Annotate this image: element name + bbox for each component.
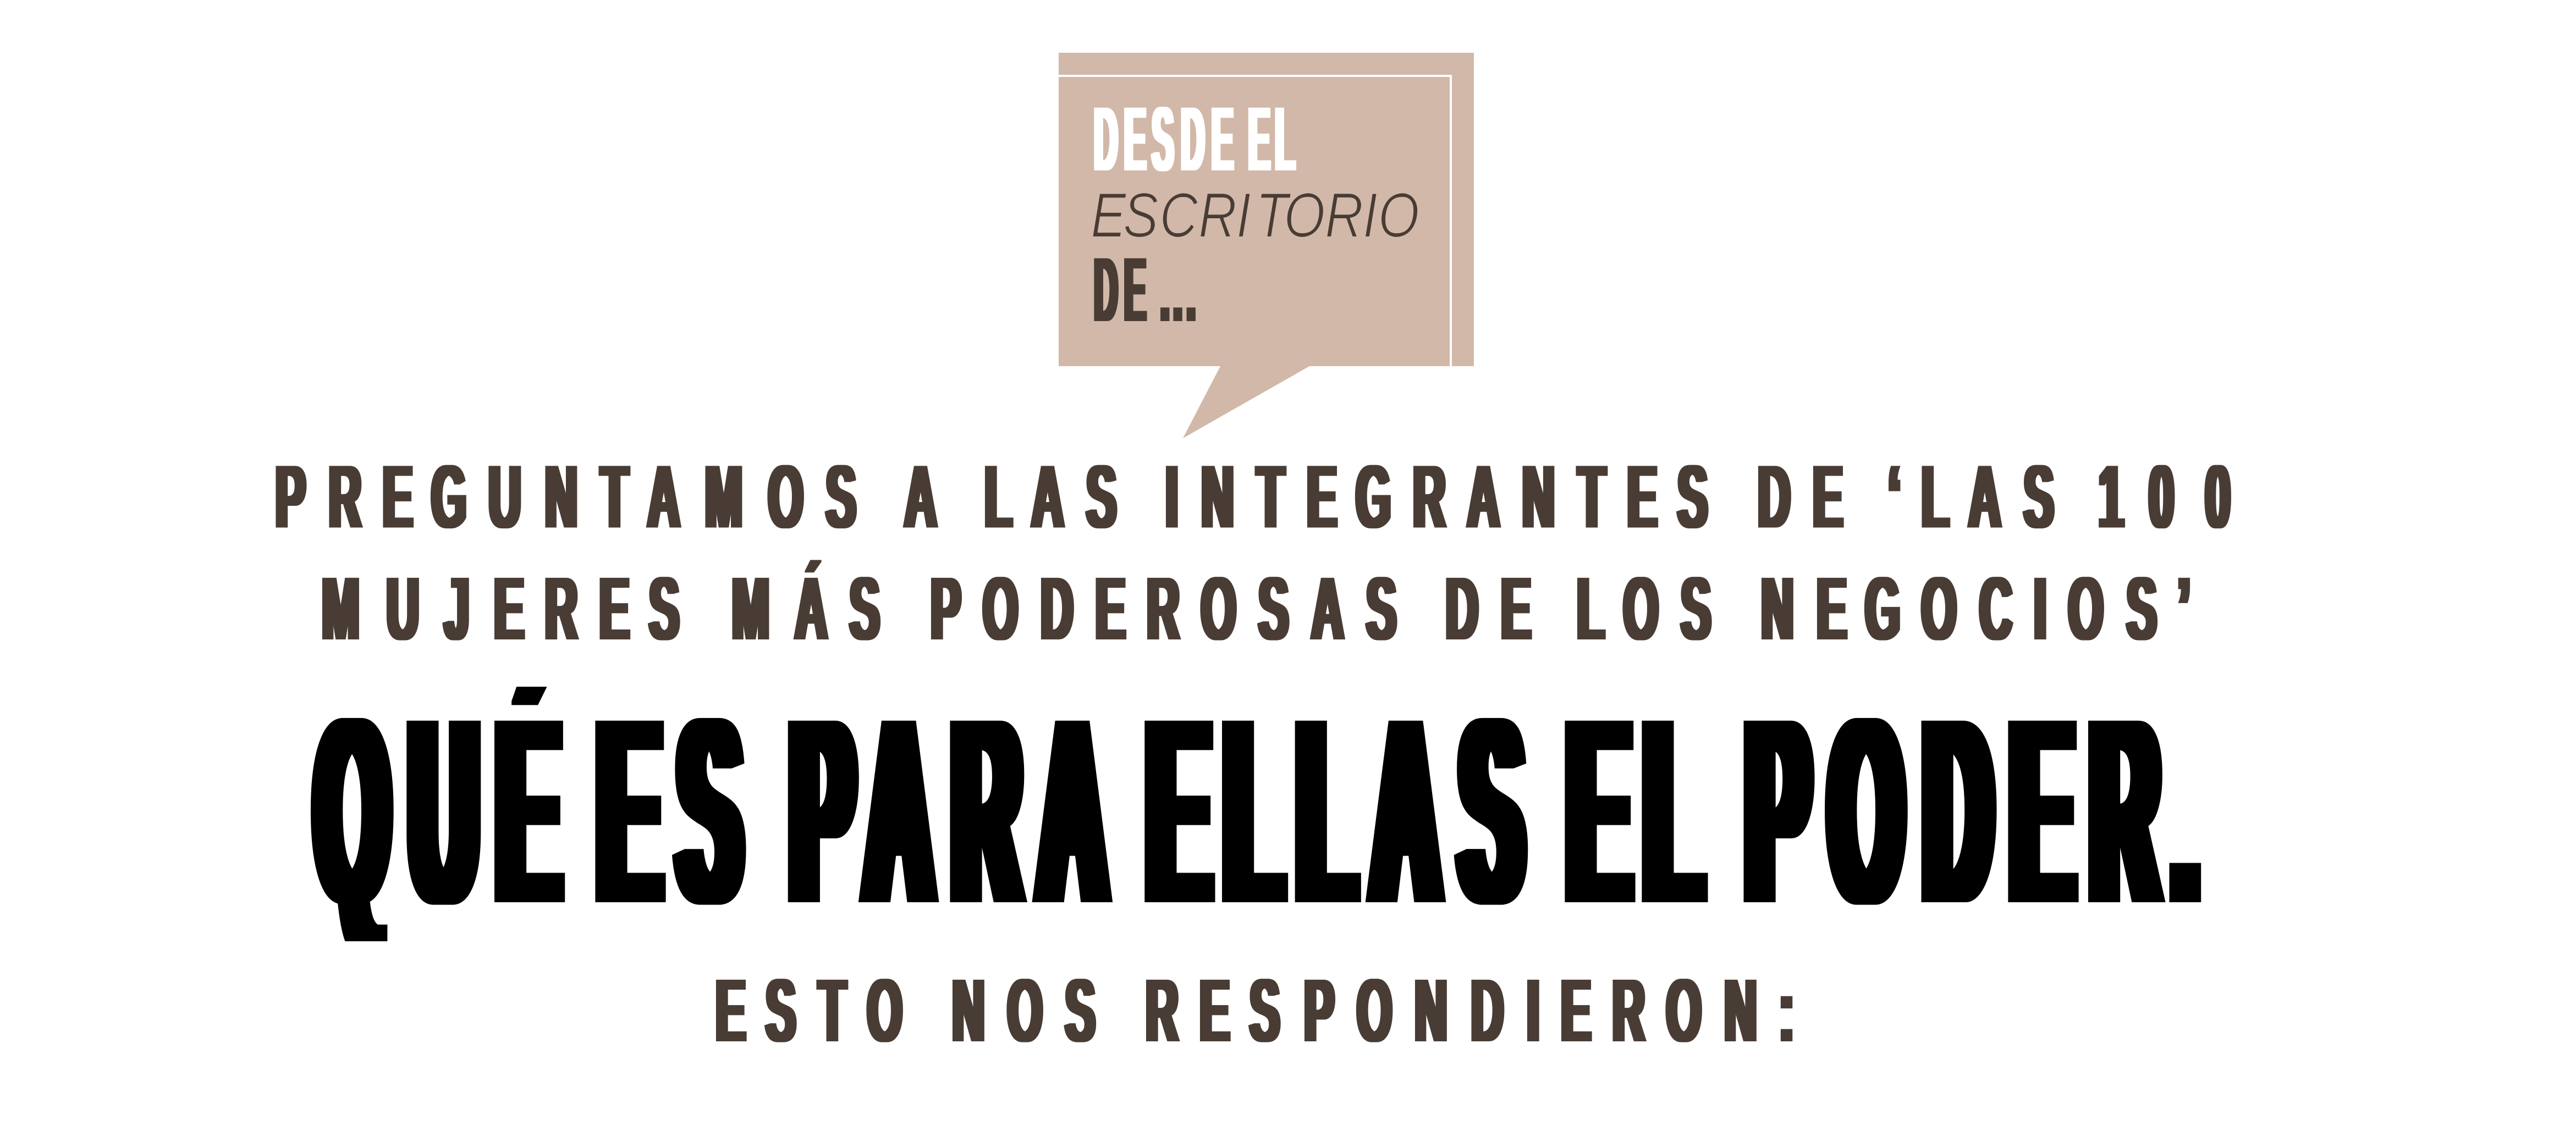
intro text line 2: MUJERES MÁS PODEROSAS DE LOS NEGOCIOS’ (322, 559, 2190, 659)
speech bubble callout (1059, 53, 1474, 438)
closing text line: ESTO NOS RESPONDIERON: (716, 961, 1794, 1061)
bubble text: de: DE ... (1094, 239, 1196, 341)
main headline: QUÉ ES PARA ELLAS EL PODER. (316, 664, 2198, 959)
intro text line 1: PREGUNTAMOS A LAS INTEGRANTES DE ‘LAS 100 (276, 447, 2230, 547)
bubble text: desde el: DESDE EL (1094, 89, 1295, 190)
bubble text: escritorio: ESCRITORIO (1091, 180, 1419, 251)
